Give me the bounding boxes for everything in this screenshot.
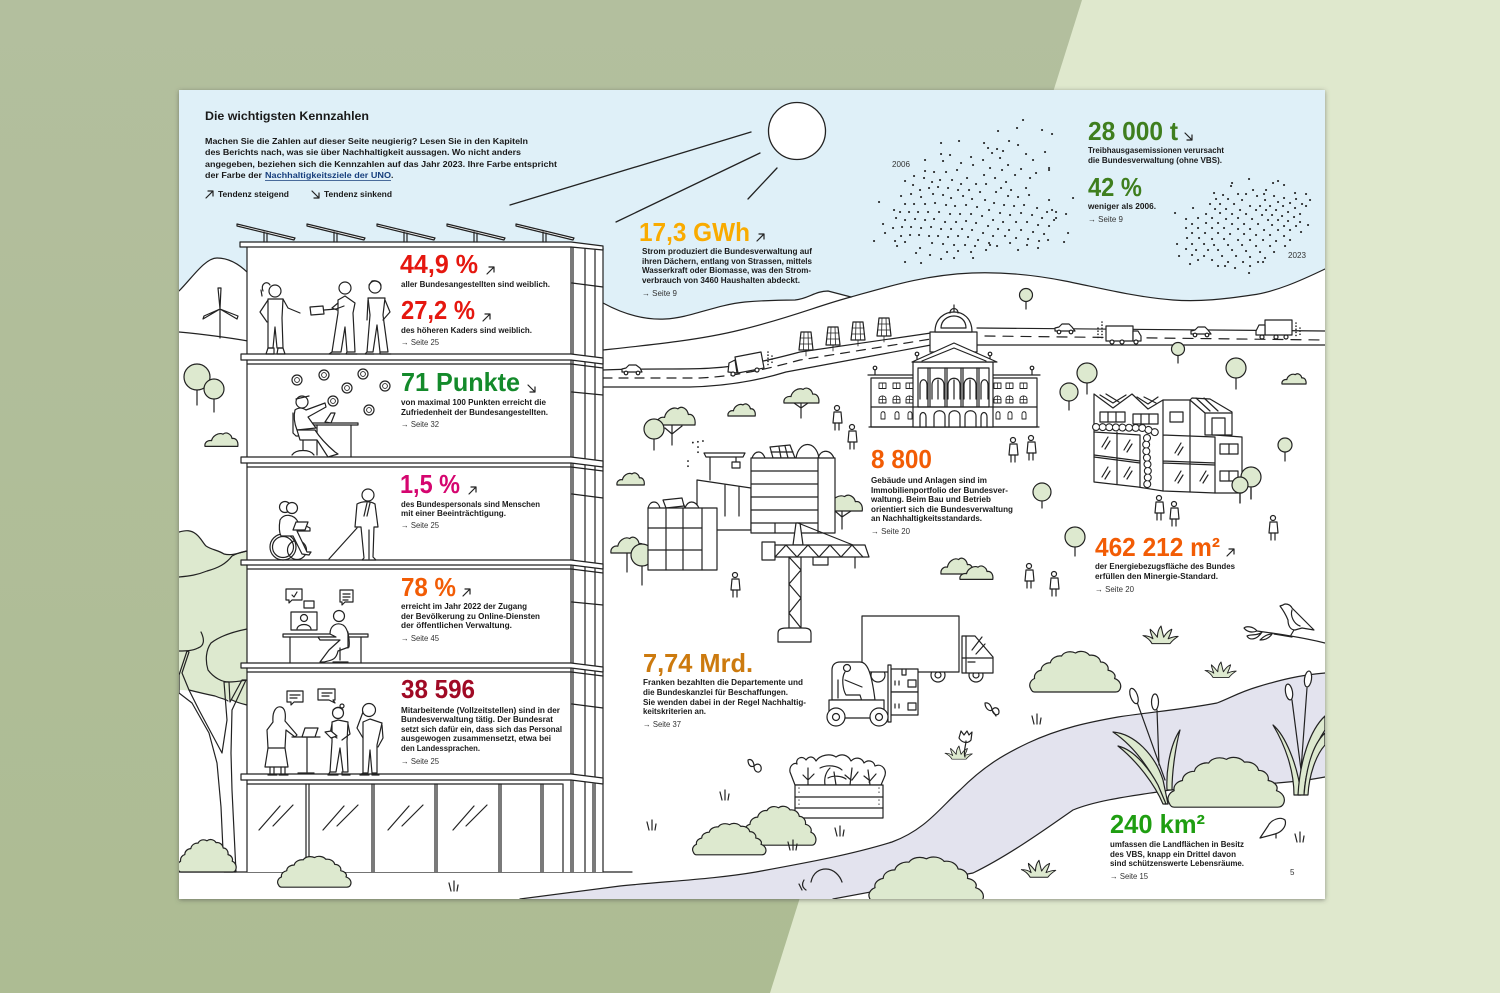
truck 2 xyxy=(1098,322,1141,344)
stat: 38 596: → Seite 25 xyxy=(401,757,440,766)
tick grass building front xyxy=(449,881,458,891)
car left xyxy=(622,365,642,375)
stat: 1,5 %: 1,5 % xyxy=(400,469,460,499)
stat: 28 000 t: die Bundesverwaltung (ohne VBS). xyxy=(1088,155,1222,165)
small tick plants xyxy=(647,714,1304,850)
stat: 78 %: 78 % xyxy=(401,572,456,602)
truck 3 xyxy=(1256,320,1300,339)
stat: 8 800: → Seite 20 xyxy=(871,527,911,536)
lollipop trees left xyxy=(184,364,224,412)
stat: 240 km²: 240 km² xyxy=(1110,809,1205,839)
lollipop trees top right xyxy=(654,288,1292,556)
hills xyxy=(179,258,1325,350)
stat: 78 %: erreicht im Jahr 2022 der Zugang xyxy=(401,601,527,611)
reeds right xyxy=(1273,671,1325,795)
slabs xyxy=(240,242,603,784)
river edges xyxy=(520,673,1325,899)
truck on left road xyxy=(728,352,772,376)
stat: 1,5 %: des Bundespersonals sind Menschen xyxy=(401,499,540,509)
stat: 42 %: → Seite 9 xyxy=(1088,215,1124,224)
illustration landscape xyxy=(177,90,1325,903)
stat: 38 596: den Landessprachen. xyxy=(401,743,480,753)
stat: 28 000 t: 28 000 t xyxy=(1088,116,1178,146)
reeds left xyxy=(1113,687,1180,804)
stat: 1,5 % xyxy=(400,469,540,530)
stat: 38 596: Bundesverwaltung tätig. Der Bundesrat xyxy=(401,714,553,724)
wind turbine xyxy=(203,288,238,338)
stat: 27,2 %: des höheren Kaders sind weiblich. xyxy=(401,325,532,335)
stat: 7,74 Mrd.: die Bundeskanzlei für Beschaffungen. xyxy=(643,687,788,697)
construction site with buildings and crane xyxy=(648,441,869,642)
people floor 1 xyxy=(260,281,391,354)
label 2006: 2006 xyxy=(892,160,911,169)
stat: 17,3 GWh: ihren Dächern, entlang von Strassen, mittels xyxy=(642,256,812,266)
stat: 42 % xyxy=(1087,172,1156,224)
stat: 17,3 GWh: 17,3 GWh xyxy=(639,217,750,247)
roof solar panels xyxy=(237,224,574,242)
stat: 8 800 xyxy=(870,444,1013,536)
butterflies xyxy=(748,703,999,772)
stat: 38 596 xyxy=(401,674,562,766)
background: light diagonal xyxy=(770,0,1500,993)
stat: 462 212 m²: der Energiebezugsfläche des Bundes xyxy=(1095,561,1235,571)
stat: 17,3 GWh: Strom produziert die Bundesverwaltung auf xyxy=(642,246,812,256)
road right xyxy=(977,328,1325,345)
stat: 38 596: Mitarbeitende (Vollzeitstellen) sind in der xyxy=(401,705,561,715)
paper sheet xyxy=(179,90,1325,899)
bushes foreground xyxy=(693,651,1121,903)
stat: 7,74 Mrd.: Franken bezahlten die Departemente und xyxy=(643,677,803,687)
CO2 dots 2023 xyxy=(1175,179,1310,273)
stat: 1,5 %: mit einer Beeinträchtigung. xyxy=(401,508,506,518)
stat: 7,74 Mrd.: 7,74 Mrd. xyxy=(643,648,753,678)
intro text: der Farbe der xyxy=(205,170,263,180)
stat: 78 %: → Seite 45 xyxy=(401,634,440,643)
people floor 5: meeting xyxy=(265,689,383,775)
bush big on river xyxy=(1168,757,1284,807)
stat: 240 km²: umfassen die Landflächen in Besitz xyxy=(1110,839,1245,849)
small bird xyxy=(1260,818,1285,838)
stat: 42 %: 42 % xyxy=(1088,172,1142,202)
stat: 44,9 % xyxy=(400,249,550,289)
title: Die wichtigsten Kennzahlen xyxy=(205,111,369,123)
stat: 8 800: Immobilienportfolio der Bundesver- xyxy=(871,485,1008,495)
stat: 240 km² xyxy=(1110,809,1245,881)
header xyxy=(205,111,557,199)
intro text xyxy=(205,136,557,180)
stat: 28 000 t xyxy=(1088,116,1224,165)
stat: 7,74 Mrd.: → Seite 37 xyxy=(643,720,682,729)
stat: 71 Punkte xyxy=(401,367,548,429)
stat: 462 212 m²: 462 212 m² xyxy=(1095,532,1220,562)
intro text: . xyxy=(391,170,393,180)
stat: 78 %: der Bevölkerung zu Online-Diensten xyxy=(401,611,540,621)
stat: 17,3 GWh xyxy=(639,217,812,298)
forklift with boxes xyxy=(827,662,918,726)
ground line xyxy=(179,871,632,873)
stat: 8 800: Gebäude und Anlagen sind im xyxy=(871,475,987,485)
people floor 4: online desk xyxy=(283,589,368,663)
big tree left xyxy=(179,531,247,872)
intro text: Machen Sie die Zahlen auf dieser Seite neugierig? Lesen Sie in den Kapiteln xyxy=(205,136,528,146)
stat: 462 212 m² xyxy=(1095,532,1235,594)
stat: 240 km²: des VBS, knapp ein Drittel davon xyxy=(1110,849,1236,859)
stat: 71 Punkte: Zufriedenheit der Bundesangestellten. xyxy=(401,407,548,417)
rock half-dome xyxy=(799,869,842,890)
stat: 38 596: setzt sich dafür ein, dass sich das Personal xyxy=(401,724,562,734)
stat: 71 Punkte: von maximal 100 Punkten erreicht die xyxy=(401,397,546,407)
stat: 8 800: orientiert sich die Bundesverwaltung xyxy=(871,504,1013,514)
truck large xyxy=(862,616,993,682)
shrub in front of building xyxy=(278,856,351,887)
cars right xyxy=(1055,324,1211,337)
stat: 7,74 Mrd.: keitskriterien an. xyxy=(643,706,706,716)
legend trends: Tendenz sinkend xyxy=(324,189,392,199)
stat: 71 Punkte: 71 Punkte xyxy=(401,367,520,397)
legend trends xyxy=(206,189,392,199)
stat: 27,2 % xyxy=(401,295,532,347)
sky xyxy=(179,90,1325,319)
stat: 42 %: weniger als 2006. xyxy=(1087,201,1156,211)
stat: 8 800: waltung. Beim Bau und Betrieb xyxy=(870,494,991,504)
stat: 17,3 GWh: Wasserkraft oder Biomasse, was den Strom- xyxy=(642,265,811,275)
intro text: des Berichts nach, was sie über Nachhaltigkeit aussagen. Wo nicht anders xyxy=(205,147,521,157)
cloud-shaped shrub left xyxy=(205,433,238,446)
stat: 7,74 Mrd.: Sie wenden dabei in der Regel Nachhaltig- xyxy=(643,697,806,707)
stat: 8 800: 8 800 xyxy=(871,444,932,474)
stat: 240 km²: sind schützenswerte Lebensräume. xyxy=(1110,858,1244,868)
Bundeshaus parliament building xyxy=(868,305,1040,427)
stat: 7,74 Mrd. xyxy=(643,648,806,729)
legend trends: Tendenz steigend xyxy=(218,189,289,199)
ground floor glazing xyxy=(259,784,593,872)
stat: 1,5 %: → Seite 25 xyxy=(401,521,440,530)
bush bottom left xyxy=(177,840,236,872)
stat: 38 596: ausgewogen zusammensetzt, etwa bei xyxy=(401,733,551,743)
bird on branch xyxy=(1244,604,1325,643)
stat: 240 km²: → Seite 15 xyxy=(1110,872,1149,881)
stat: 44,9 %: aller Bundesangestellten sind weiblich. xyxy=(401,279,550,289)
river xyxy=(520,673,1325,899)
stat: 38 596: 38 596 xyxy=(401,674,475,704)
tulip xyxy=(959,731,972,757)
people floor 2: desk worker and smileys xyxy=(292,369,390,457)
stat: 44,9 %: 44,9 % xyxy=(400,249,478,279)
building office block xyxy=(240,242,603,872)
sun with rays xyxy=(510,102,826,222)
stat: 8 800: an Nachhaltigkeitsstandards. xyxy=(871,513,982,523)
modern green building xyxy=(1094,394,1261,503)
people floor 3: wheelchair and blind person xyxy=(270,489,378,560)
stat: 462 212 m²: → Seite 20 xyxy=(1095,585,1135,594)
stat: 17,3 GWh: → Seite 9 xyxy=(642,289,678,298)
CO2 dots 2006 xyxy=(874,120,1073,263)
stat: 78 %: der öffentlichen Verwaltung. xyxy=(401,620,512,630)
stat: 27,2 %: → Seite 25 xyxy=(401,338,440,347)
solar panels field xyxy=(799,318,891,356)
stat: 462 212 m²: erfüllen den Minergie-Standard. xyxy=(1095,571,1218,581)
cloud trees and shrubs xyxy=(611,374,1306,585)
intro text: angegeben, beziehen sich die Kennzahlen auf das Jahr 2023. Ihre Farbe entspricht xyxy=(205,159,557,169)
stat: 78 % xyxy=(401,572,540,643)
stat: 27,2 %: 27,2 % xyxy=(401,295,475,325)
raised bed with plants xyxy=(790,755,885,818)
intro text: Nachhaltigkeitsziele der UNO xyxy=(265,170,391,180)
page number: 5 xyxy=(1290,868,1295,877)
stat: 71 Punkte: → Seite 32 xyxy=(401,420,440,429)
grass tufts xyxy=(945,626,1236,877)
small people xyxy=(731,406,1278,597)
stat: 28 000 t: Treibhausgasemissionen verursacht xyxy=(1088,145,1224,155)
label 2023: 2023 xyxy=(1288,251,1307,260)
stat: 17,3 GWh: verbrauch von 3460 Haushalten abdeckt. xyxy=(642,275,800,285)
road left xyxy=(603,333,931,387)
